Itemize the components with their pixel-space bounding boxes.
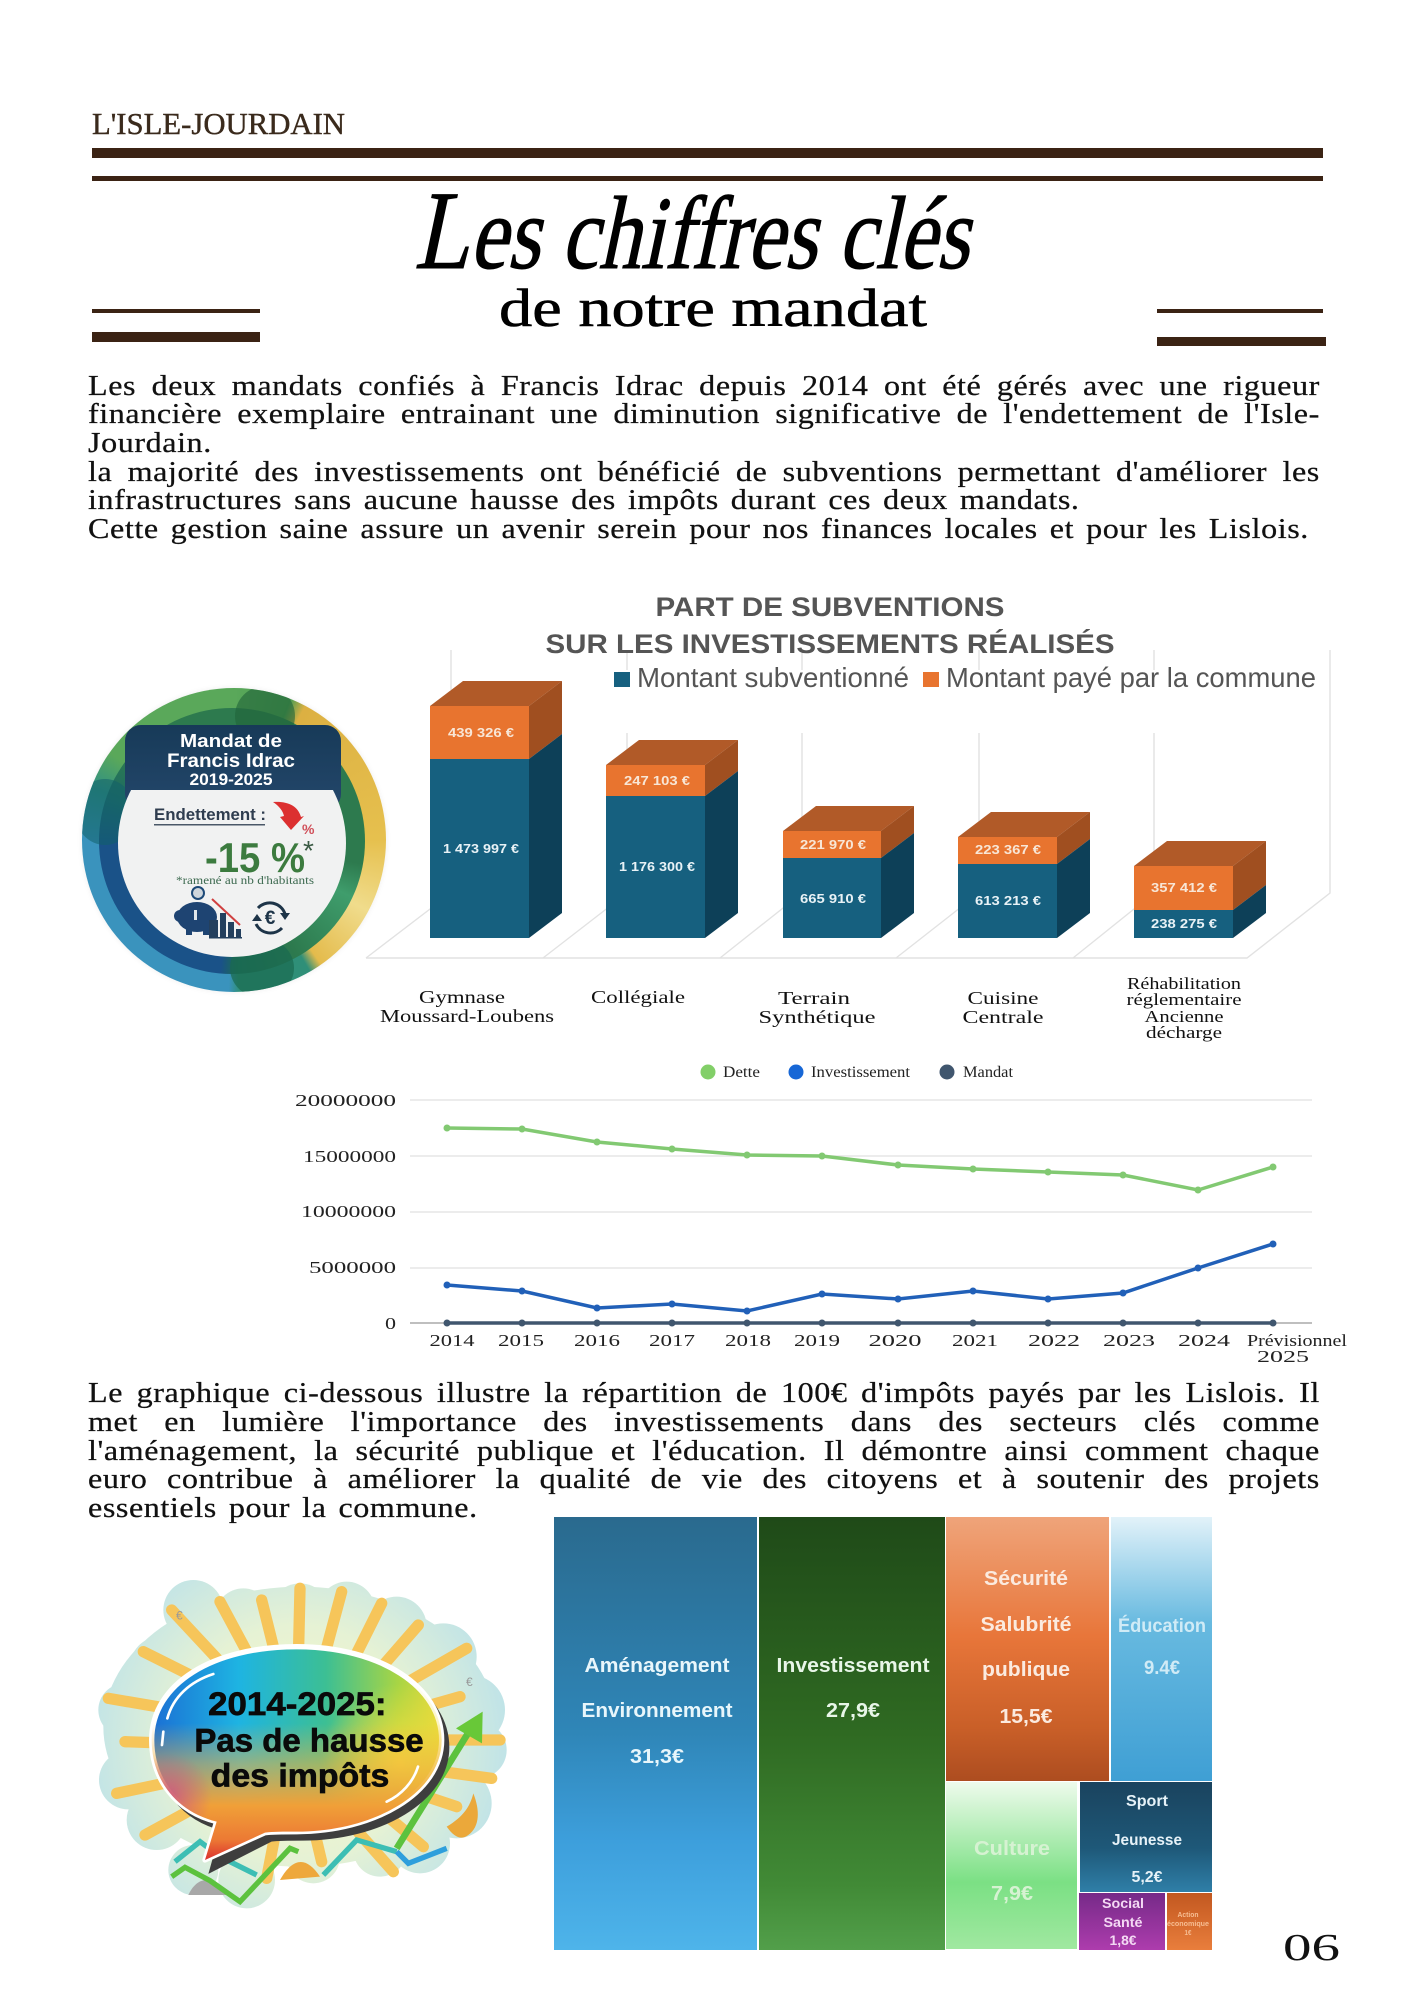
category labels: Réhabilitation [1127,974,1241,993]
bubble text: des impôts [211,1758,389,1794]
tile: Social Santé: 1,8€ [1110,1932,1137,1948]
icon: red down arrow [273,802,304,830]
tile: Aménagement Environnement: Aménagement [584,1655,730,1677]
value: -15 %: * [303,835,314,866]
tile: Social Santé [1079,1893,1165,1950]
label: endettement: Endettement : [154,805,266,824]
legend [700,1064,1014,1081]
sun rays [108,1588,500,1878]
y axis labels: 20000000 [295,1091,396,1110]
header: masthead and rules [92,106,1326,346]
orange flame and euro marks [176,1608,478,1895]
legend: Montant payé par la commune [946,662,1316,693]
subtitle: de notre mandat: de notre mandat [499,278,927,338]
y axis labels: 15000000 [303,1147,396,1166]
tile: Social Santé: Santé [1104,1914,1143,1930]
bar: Collégiale: 1 176 300 € [619,859,695,874]
legend: Montant subventionné [637,662,909,693]
category labels: décharge [1146,1023,1222,1042]
bar: Réhabilitation: 238 275 € [1151,916,1217,931]
tile: Aménagement Environnement: Environnement [582,1700,733,1722]
value: -15 %: % [302,821,315,837]
x axis labels: 2023 [1103,1331,1155,1350]
legend: Mandat [963,1064,1014,1081]
x axis labels [430,1331,1347,1366]
note: ramené au nb d'habitants: *ramené au nb d'habitants [176,873,314,887]
tile: Sécurité Salubrité publique: Salubrité [980,1614,1072,1636]
ring overlap blobs [75,686,295,998]
bar: Cuisine centrale [958,812,1090,938]
banner: Francis Idrac [167,751,295,772]
x axis labels: 2016 [574,1331,620,1350]
category labels: Terrain [778,988,850,1008]
category labels: Moussard-Loubens [380,1006,554,1026]
tile: Sport Jeunesse: Jeunesse [1112,1832,1182,1849]
y axis labels: 0 [385,1314,396,1333]
category labels: Ancienne [1144,1007,1224,1026]
bar: Réhabilitation [1134,841,1266,938]
line chart: dette, investissement, mandat [295,1064,1347,1366]
bar: Réhabilitation: 357 412 € [1151,880,1217,895]
text block: explication du graphique: euro contribue à améliorer la qualité de vie des citoyens et à soutenir des projets [88,1464,1320,1495]
icon: piggy bank with falling bars [174,887,242,938]
x axis labels: 2017 [649,1331,696,1350]
category labels: réglementaire [1126,990,1242,1009]
series: dette [444,1124,1276,1194]
chart title: PART DE SUBVENTIONS [656,592,1004,622]
speech bubble: pas de hausse des impôts [98,1580,507,1908]
bubble text: 2014-2025: [208,1686,387,1722]
category labels: Gymnase [419,987,505,1007]
text block: explication du graphique [88,1378,1320,1524]
tile: Sécurité Salubrité publique: publique [982,1659,1070,1681]
x axis labels: Prévisionnel [1247,1331,1347,1350]
text block: intro paragraph: infrastructures sans aucune hausse des impôts durant ces deux mandats. [88,485,1080,516]
tile: Culture: 7,9€ [991,1883,1033,1905]
banner: 2019-2025 [190,770,272,789]
category labels [380,974,1242,1042]
tile: Sécurité Salubrité publique [946,1517,1109,1781]
x axis labels: 2024 [1178,1331,1231,1350]
page number: 06 [1283,1927,1340,1969]
tile: Investissement: 27,9€ [826,1700,880,1722]
tile: Action économique [1167,1893,1212,1950]
bubble text: Pas de hausse [194,1723,424,1759]
bar: Gymnase: 1 473 997 € [443,841,519,856]
tile: Sport Jeunesse: 5,2€ [1132,1869,1163,1886]
category labels: Cuisine [968,988,1038,1008]
bar: Terrain synthétique: 221 970 € [800,837,866,852]
heading: town name: L'ISLE-JOURDAIN [92,106,345,141]
bar: Cuisine centrale: 223 367 € [975,842,1041,857]
bubble text [194,1686,424,1794]
bar: Terrain synthétique: 665 910 € [800,891,866,906]
series: investissement [444,1240,1276,1314]
cloud background [98,1580,507,1908]
legend: Investissement [811,1064,911,1081]
tile: Investissement: Investissement [776,1655,930,1677]
y axis labels: 5000000 [309,1258,396,1277]
bar: Collégiale [606,740,738,938]
tile: Éducation [1111,1517,1212,1781]
tile: Sécurité Salubrité publique: Sécurité [984,1568,1068,1590]
bar chart: part de subventions [366,592,1331,1042]
category labels: Centrale [962,1007,1044,1027]
bar: Terrain synthétique [783,806,914,938]
category labels: Synthétique [758,1007,876,1027]
series: mandat [444,1320,1276,1326]
badge: mandat endettement -15% [82,688,386,992]
orange flame and euro marks: € [466,1675,473,1689]
tile: Social Santé: Social [1102,1895,1144,1911]
y axis labels [295,1091,396,1333]
text block: intro paragraph: Cette gestion saine assure un avenir serein pour nos finances locales et pour les Lislois. [88,514,1309,545]
text block: explication du graphique: l'aménagement, la sécurité publique et l'éducation. Il démontre ainsi comment chaque [88,1436,1320,1467]
x axis labels: 2022 [1028,1331,1080,1350]
banner: Mandat de [180,731,282,751]
text block: intro paragraph: la majorité des investissements ont bénéficié de subventions permettant d'améliorer les [88,457,1320,488]
x axis labels: 2014 [430,1331,475,1350]
legend: Dette [723,1064,760,1081]
chart title: SUR LES INVESTISSEMENTS RÉALISÉS [546,628,1114,659]
bar: Collégiale: 247 103 € [624,773,690,788]
icon: market lines and rising arrow [172,1712,483,1902]
text block: intro paragraph: financière exemplaire entrainant une diminution significative de l'endettement de l'Isle- [88,399,1320,430]
tile: Sport Jeunesse [1080,1782,1212,1892]
tile: Action économique: Action [1178,1912,1198,1919]
chart title [546,592,1114,659]
y axis labels: 10000000 [301,1202,396,1221]
value: -15 %: -15 % [205,834,305,881]
tile: Culture [946,1782,1077,1949]
tile: Aménagement Environnement: 31,3€ [630,1746,684,1768]
x axis labels: 2025 [1257,1347,1309,1366]
text block: explication du graphique: met en lumière l'importance des investissements dans des secteurs clés comme [88,1407,1320,1438]
title: les chiffres clés: Les chiffres clés [409,169,990,293]
text block: intro paragraph: Les deux mandats confiés à Francis Idrac depuis 2014 ont été gérés avec une rigueur [88,371,1320,402]
tile: Sécurité Salubrité publique: 15,5€ [1000,1706,1052,1728]
icon: euro cycle: € [265,908,276,929]
icon: euro cycle [252,903,290,933]
tile: Aménagement Environnement [554,1517,757,1950]
bubble shape [152,1647,448,1871]
orange flame and euro marks: € [176,1608,183,1622]
tile: Investissement [759,1517,945,1950]
x axis labels: 2019 [794,1331,840,1350]
text block: explication du graphique: essentiels pour la commune. [88,1492,478,1524]
x axis labels: 2015 [498,1331,544,1350]
tile: Éducation: 9.4€ [1144,1658,1180,1679]
tile: Éducation: Éducation [1118,1615,1206,1637]
tile: Sport Jeunesse: Sport [1126,1793,1169,1810]
legend [614,662,1316,693]
bar: Cuisine centrale: 613 213 € [975,893,1041,908]
tile: Culture: Culture [974,1838,1050,1860]
tile: Action économique: économique [1167,1921,1209,1928]
x axis labels: 2021 [952,1331,998,1350]
banner [125,725,341,810]
x axis labels: 2020 [868,1331,922,1350]
bar: Gymnase: 439 326 € [448,725,514,740]
text block: intro paragraph: Jourdain. [88,428,212,459]
text block: intro paragraph [88,371,1320,545]
x axis labels: 2018 [725,1331,771,1350]
text block: explication du graphique: Le graphique ci-dessous illustre la répartition de 100€ d'impôts payés par les Lislois. Il [88,1378,1320,1409]
bar: Gymnase [430,681,562,938]
treemap: répartition de 100€ d'impôts [554,1517,1212,1950]
tile: Action économique: 1€ [1184,1930,1192,1937]
category labels: Collégiale [591,987,685,1007]
